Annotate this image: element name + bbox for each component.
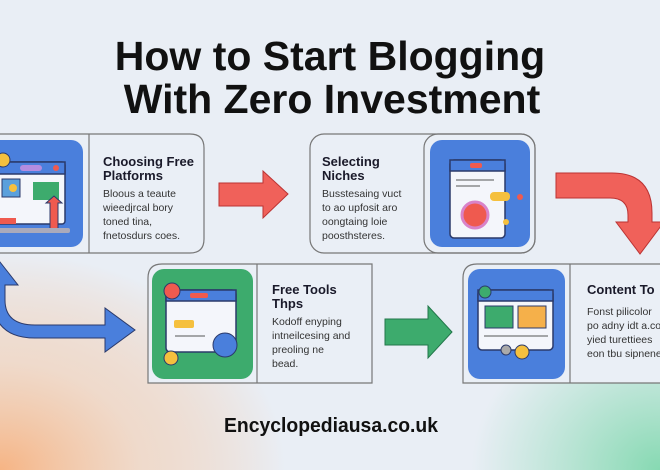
footer text: Encyclopediausa.co.uk xyxy=(224,415,439,437)
text block xyxy=(322,188,401,242)
text block: toned tina, xyxy=(103,216,152,228)
panel: choosing free platforms: Platforms xyxy=(103,168,163,183)
icon: blue browser with images xyxy=(468,269,565,379)
icon: green browser xyxy=(152,269,253,379)
text block xyxy=(587,306,660,360)
text block: Fonst pilicolor xyxy=(587,306,652,318)
text block: Busstesaing vuct xyxy=(322,188,401,200)
text block: preoling ne xyxy=(272,344,324,356)
heading: Choosing Free xyxy=(103,154,194,169)
text block: to ao upfosit aro xyxy=(322,202,397,214)
icon: laptop browser xyxy=(0,140,83,247)
arrow: red curved down xyxy=(556,173,660,254)
text block: Bloous a teaute xyxy=(103,188,176,200)
panel: selecting niches xyxy=(310,134,535,253)
text block: oongtaing loie xyxy=(322,216,388,228)
panel: content tools xyxy=(463,264,660,383)
panel: choosing free platforms xyxy=(0,134,204,253)
text block: yied turettiees xyxy=(587,334,652,346)
text block: fnetosdurs coes. xyxy=(103,230,180,242)
text block: bead. xyxy=(272,358,298,370)
icon: browser with target xyxy=(430,140,530,247)
text block xyxy=(102,188,180,242)
title: With Zero Investment xyxy=(124,76,541,122)
panel: selecting niches: Niches xyxy=(322,168,365,183)
arrow: green right xyxy=(385,306,452,358)
text block: poosthsteres. xyxy=(322,230,385,242)
title: How to Start Blogging xyxy=(115,33,545,79)
text block: eon tbu sipnene xyxy=(587,348,660,360)
text block: wieedjrcal bory xyxy=(102,202,174,214)
arrow: red right xyxy=(219,171,288,218)
arrow: blue curved xyxy=(0,262,135,352)
heading: Content To xyxy=(587,282,655,297)
text block xyxy=(272,316,350,370)
text block: intneilcesing and xyxy=(272,330,350,342)
title xyxy=(115,33,545,122)
panel: free tools tips xyxy=(148,264,372,383)
text block: Kodoff enyping xyxy=(272,316,342,328)
panel: free tools tips: Thps xyxy=(272,296,303,311)
heading: Free Tools xyxy=(272,282,337,297)
heading: Selecting xyxy=(322,154,380,169)
